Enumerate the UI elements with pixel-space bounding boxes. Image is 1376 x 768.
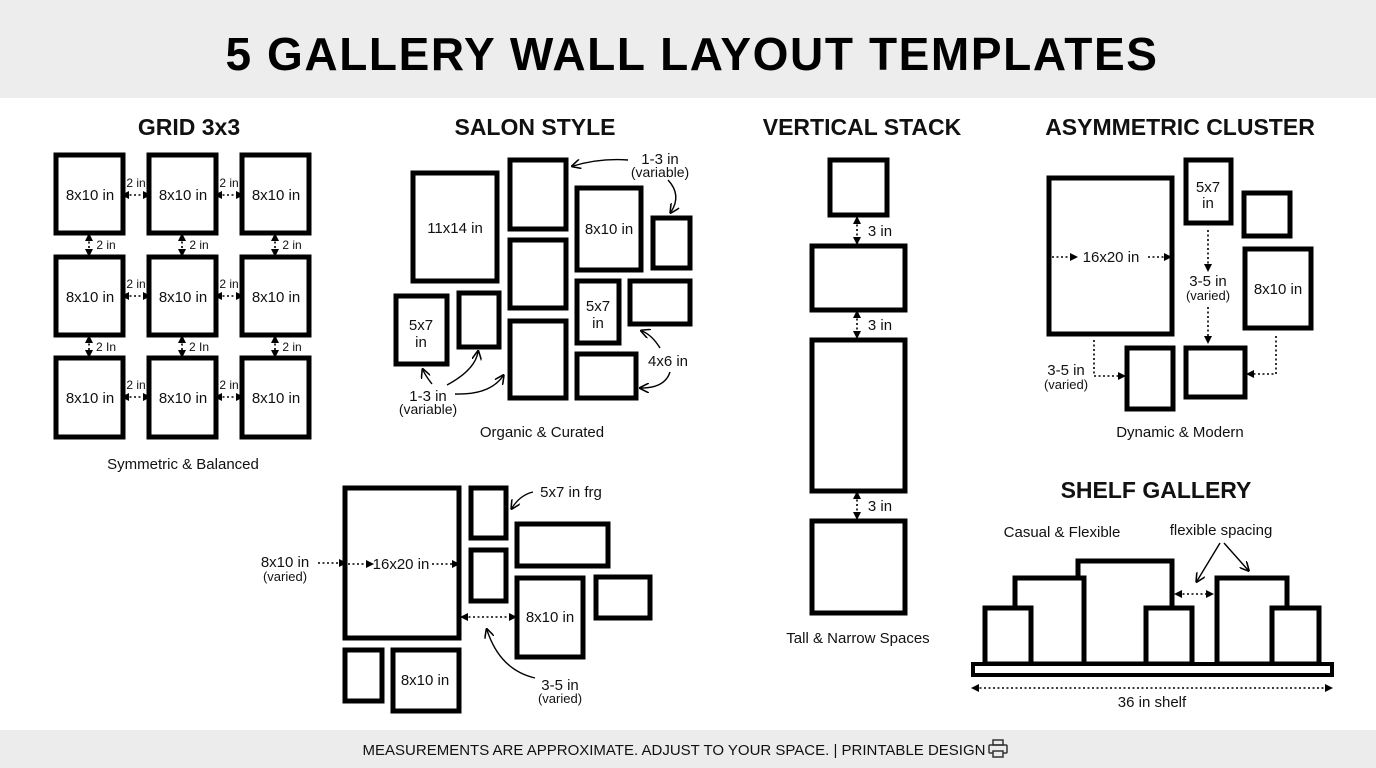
panel: grid 3x3: 8x10 in (159, 390, 207, 407)
panel: lower salon cluster: (varied) (538, 691, 582, 706)
panel: shelf gallery: 36 in shelf (1118, 694, 1187, 711)
header band: 5 GALLERY WALL LAYOUT TEMPLATES (225, 28, 1159, 80)
panel: grid 3x3: 2 In (189, 340, 209, 354)
panel: grid 3x3: 2 in (219, 378, 239, 392)
panel: grid 3x3: 2 in (282, 340, 302, 354)
panel: salon style: 1-3 in (409, 388, 447, 405)
panel: grid 3x3: 2 in (126, 378, 146, 392)
panel: grid 3x3: Symmetric & Balanced (107, 456, 259, 473)
panel: asymmetric cluster: 16x20 in (1083, 249, 1139, 266)
panel: lower salon cluster: 16x20 in (373, 556, 429, 573)
panel: grid 3x3: 2 in (126, 277, 146, 291)
panel: salon style (396, 114, 690, 441)
panel: shelf gallery (973, 477, 1332, 711)
panel: asymmetric cluster: 3-5 in (1047, 362, 1085, 379)
panel: grid 3x3: 2 in (219, 277, 239, 291)
panel: grid 3x3: 8x10 in (66, 289, 114, 306)
panel: salon style: 5x7 (409, 317, 433, 334)
panel: asymmetric cluster: ASYMMETRIC CLUSTER (1045, 114, 1315, 140)
panel: vertical stack: 3 in (868, 498, 892, 515)
panel: grid 3x3 (56, 114, 309, 473)
panel: lower salon cluster: (varied) (263, 569, 307, 584)
panel: salon style: 4x6 in (648, 353, 688, 370)
panel: grid 3x3: 8x10 in (159, 187, 207, 204)
panel: salon style: Organic & Curated (480, 424, 604, 441)
panel: grid 3x3: 2 In (96, 340, 116, 354)
panel: grid 3x3: 2 in (189, 238, 209, 252)
panel: lower salon cluster (261, 484, 650, 711)
panel: grid 3x3: 8x10 in (66, 390, 114, 407)
panel: grid 3x3: 8x10 in (252, 187, 300, 204)
panel: vertical stack: 3 in (868, 317, 892, 334)
panel: asymmetric cluster: 5x7 (1196, 179, 1220, 196)
panel: salon style: SALON STYLE (454, 114, 616, 140)
panel: grid 3x3: 2 in (96, 238, 116, 252)
panel: asymmetric cluster: 8x10 in (1254, 281, 1302, 298)
panel: lower salon cluster: 3-5 in (541, 677, 579, 694)
panel: grid 3x3: 2 in (219, 176, 239, 190)
panel: asymmetric cluster: in (1202, 195, 1214, 212)
panel: grid 3x3: GRID 3x3 (138, 114, 240, 140)
panel: lower salon cluster: 8x10 in (261, 554, 309, 571)
panel: asymmetric cluster: (varied) (1044, 377, 1088, 392)
panel: grid 3x3: 8x10 in (252, 289, 300, 306)
panel: grid 3x3: 8x10 in (159, 289, 207, 306)
panel: salon style: 1-3 in (641, 151, 679, 168)
panel: asymmetric cluster: 3-5 in (1189, 273, 1227, 290)
panel: lower salon cluster: 5x7 in frg (540, 484, 602, 501)
panel: salon style: 11x14 in (427, 220, 483, 237)
panel: grid 3x3: 8x10 in (252, 390, 300, 407)
panel: salon style: in (415, 334, 427, 351)
panel: asymmetric cluster: Dynamic & Modern (1116, 424, 1244, 441)
panel: shelf gallery: SHELF GALLERY (1061, 477, 1251, 503)
panel: grid 3x3: 2 in (126, 176, 146, 190)
panel: vertical stack: VERTICAL STACK (763, 114, 962, 140)
footer band: MEASUREMENTS ARE APPROXIMATE. ADJUST TO YOUR SPACE. | PRINTABLE DESIGN (363, 742, 985, 759)
panel: salon style: 5x7 (586, 298, 610, 315)
panel: shelf gallery: Casual & Flexible (1004, 524, 1120, 541)
panel: salon style: in (592, 315, 604, 332)
panel: salon style: (variable) (399, 401, 457, 417)
panel: grid 3x3: 8x10 in (66, 187, 114, 204)
panel: vertical stack: 3 in (868, 223, 892, 240)
panel: shelf gallery: flexible spacing (1170, 522, 1272, 539)
panel: salon style: 8x10 in (585, 221, 633, 238)
header band (0, 0, 1376, 98)
panel: grid 3x3: 2 in (282, 238, 302, 252)
panel: vertical stack (763, 114, 962, 647)
panel: lower salon cluster: 8x10 in (526, 609, 574, 626)
panel: asymmetric cluster: (varied) (1186, 288, 1230, 303)
panel: asymmetric cluster (1044, 114, 1315, 441)
footer band (0, 730, 1376, 768)
panel: vertical stack: Tall & Narrow Spaces (786, 630, 930, 647)
icon: printer (989, 740, 1007, 757)
panel: lower salon cluster: 8x10 in (401, 672, 449, 689)
panel: salon style: (variable) (631, 164, 689, 180)
